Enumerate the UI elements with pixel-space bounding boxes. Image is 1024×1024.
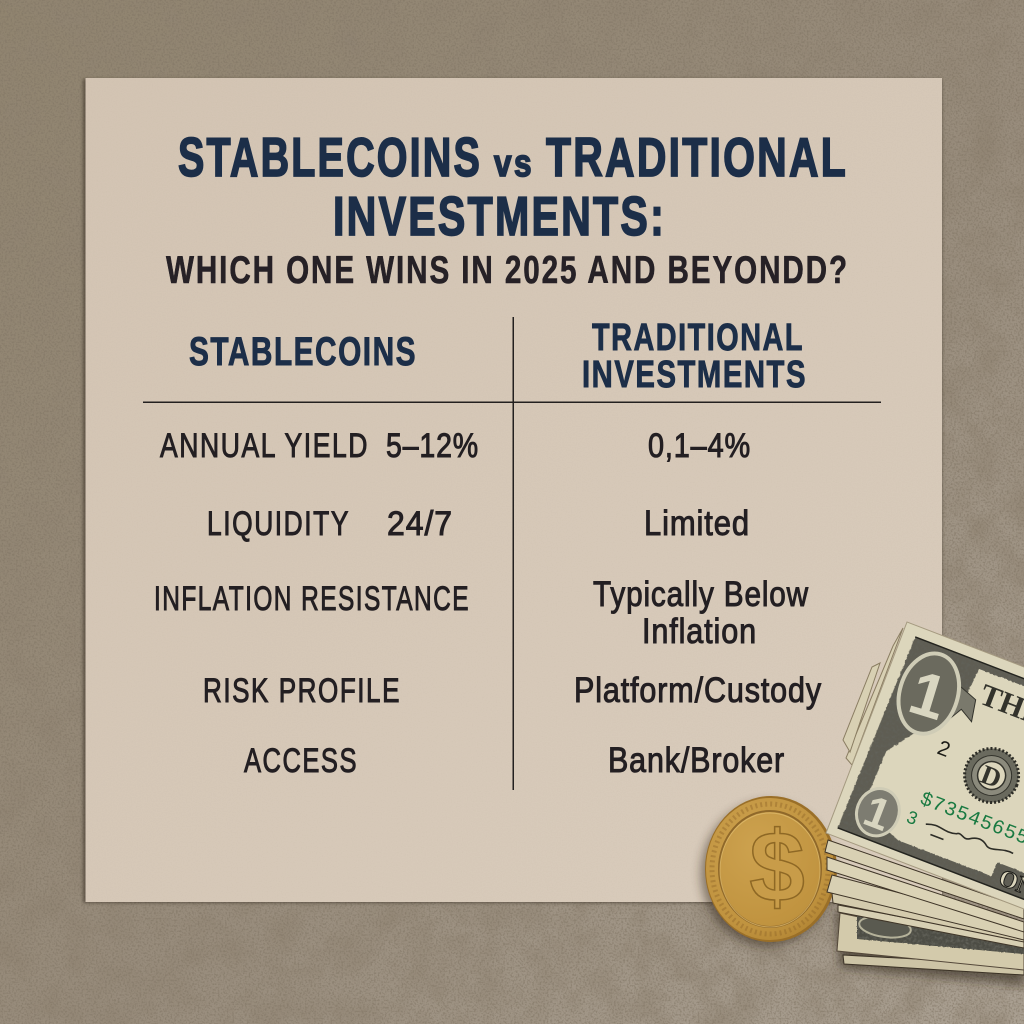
row: annual yield [160,427,751,465]
panel: comparison card [83,78,942,903]
column header: traditional investments [582,317,807,396]
title: vs [494,143,534,185]
row: inflation resistance [154,575,809,651]
row: liquidity: LIQUIDITY [207,505,350,543]
title: STABLECOINS [178,126,482,188]
column header: traditional investments: INVESTMENTS [582,354,807,396]
row: risk profile: Platform/Custody [574,671,822,710]
small numeral oval: 1 [857,786,898,841]
row: annual yield: 0,1–4% [648,427,751,465]
row: risk profile [203,671,822,710]
row: liquidity: Limited [644,504,750,543]
row: access [244,741,785,780]
row: annual yield: ANNUAL YIELD [160,427,369,465]
title: TRADITIONAL [546,126,848,188]
title: INVESTMENTS: [333,185,666,247]
shadow under the money [835,910,1024,985]
row: liquidity [207,504,750,543]
row: inflation resistance: Typically Below [593,575,809,614]
icon: gold coin: $ [749,811,805,923]
lower bills [825,840,1024,975]
row: inflation resistance: Inflation [642,612,757,651]
row: risk profile: RISK PROFILE [203,672,401,710]
icon: stack of dollar bills [825,622,1024,975]
column header: traditional investments: TRADITIONAL [592,317,804,359]
bill frame [838,635,1024,932]
row: access: ACCESS [244,742,358,780]
top bill [826,622,1024,940]
ribbon beside numeral [940,682,982,727]
large numeral oval: 1 [901,658,955,734]
small numeral oval [849,782,906,844]
column header: stablecoins: STABLECOINS [189,330,417,374]
row: inflation resistance: INFLATION RESISTANCE [154,580,470,618]
corner ornament [990,862,1024,927]
title [178,126,848,247]
fanned bills behind [843,628,903,765]
row: annual yield: 5–12% [386,427,479,465]
seal: D [977,759,1006,794]
icon: gold coin [701,796,837,946]
row: access: Bank/Broker [608,741,785,780]
row: liquidity: 24/7 [387,505,453,543]
seal [957,741,1024,810]
bill number 3: 3 [904,807,920,829]
bill number 2: 2 [934,736,953,762]
large numeral oval [884,642,974,745]
signature [923,819,1014,865]
